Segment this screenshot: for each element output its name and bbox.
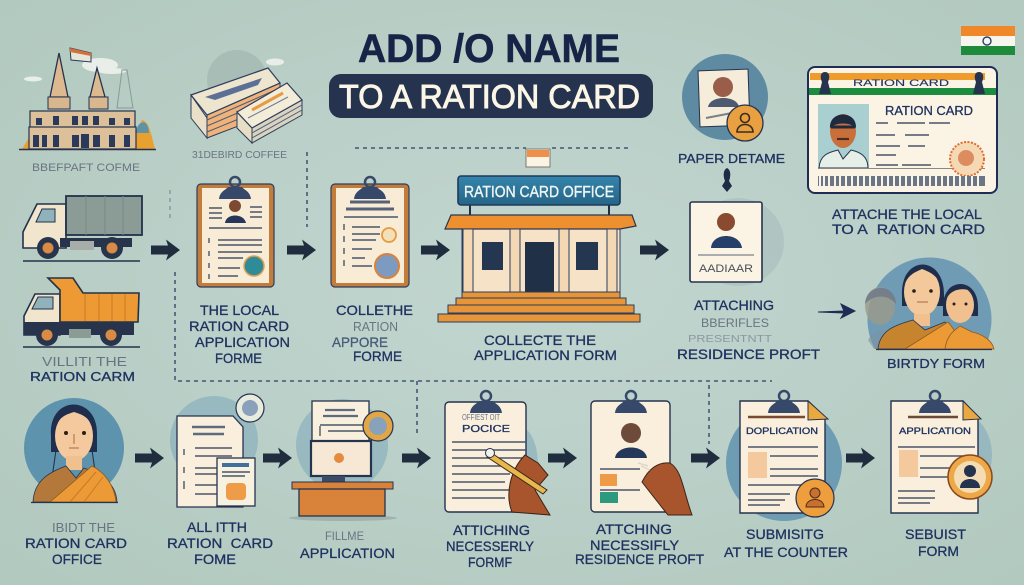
- arrow: [287, 240, 316, 260]
- icon: grey truck: [23, 196, 142, 261]
- icon: small flag: [526, 149, 550, 167]
- label: visit: VILLITI THE: [42, 354, 127, 369]
- arrow: [548, 448, 577, 468]
- label: attaching residence proof: ATTACHING: [694, 297, 774, 313]
- label: attaching necessary form: [446, 522, 535, 570]
- arrow: [421, 240, 450, 260]
- icon: paper stacks: [191, 50, 302, 143]
- label: all ration card form: ALL ITTH: [187, 519, 247, 535]
- icon: orange dump truck: [23, 278, 140, 347]
- label: paper stacks: 31DEBIRD COFFEE: [192, 150, 287, 161]
- label: visit: RATION CARM: [30, 369, 135, 384]
- icon: clipboard with photo and hand: [591, 391, 692, 515]
- icon: sample ration card: RATION CARD: [885, 103, 973, 118]
- label: visit: [30, 354, 135, 384]
- label: local form: THE LOCAL: [200, 302, 279, 318]
- arrow: [402, 448, 431, 468]
- title line one: ADD /O NAME: [358, 27, 620, 71]
- label: local form: FORME: [215, 350, 262, 366]
- label: attaching residence proof: RESIDENCE PROFT: [677, 346, 820, 362]
- label: collect form: APPORE: [332, 334, 388, 350]
- label: filling application: FILLME: [325, 529, 364, 543]
- label: submit form: SEBUIST: [905, 526, 966, 542]
- icon: clipboard local form: [197, 177, 274, 287]
- label: attach to ration card: ATTACHE THE LOCAL: [832, 206, 982, 222]
- illustration: women: [865, 257, 994, 350]
- label: attaching residence proof lower: RESIDENCE PROFT: [575, 551, 704, 567]
- label: attaching necessary form: NECESSERLY: [446, 538, 535, 554]
- icon: passport photo circle: [682, 54, 768, 141]
- illustration: woman at office: [24, 398, 124, 502]
- icon: clipboard with hand and pencil: [445, 391, 550, 515]
- label: submitting at counter: SUBMISITG: [746, 526, 824, 542]
- arrow: [640, 240, 669, 260]
- arrow: [151, 240, 180, 260]
- icon: duplicate application with medal: DOPLICATION: [746, 426, 818, 436]
- icon: sample ration card: RATION CARD: [853, 78, 950, 88]
- label: attaching residence proof: [677, 297, 820, 362]
- icon: duplicate application with medal: [726, 391, 842, 521]
- label: visit office: OFFICE: [52, 551, 102, 567]
- label: all ration card form: FOME: [194, 551, 236, 567]
- label: submit form: [905, 526, 966, 559]
- label: collect application: COLLECTE THE: [484, 332, 596, 348]
- label: collect form: RATION: [353, 319, 398, 334]
- label: visit office: IBIDT THE: [52, 520, 115, 535]
- arrow: thin: [818, 304, 855, 318]
- label: filling application: APPLICATION: [300, 545, 395, 561]
- icon: application with seal: APPLICATION: [899, 426, 971, 436]
- dashed connectors: [170, 148, 772, 444]
- label: collect application: [474, 332, 617, 363]
- label: submitting at counter: AT THE COUNTER: [724, 544, 848, 560]
- label: all ration card form: RATION CARD: [167, 535, 273, 551]
- label: birthday form: BIRTDY FORM: [887, 356, 985, 371]
- label: attaching residence proof lower: [575, 521, 704, 567]
- icon: sample ration card: [808, 67, 997, 193]
- arrow: [263, 448, 292, 468]
- icon: documents with seal: [170, 394, 264, 507]
- icon: down pointer: [722, 168, 732, 192]
- label: attaching residence proof: BBERIFLES: [701, 316, 769, 330]
- label: attach to ration card: [832, 206, 985, 237]
- office sign: RATION CARD OFFICE: [464, 184, 614, 201]
- label: visit office: [25, 520, 127, 567]
- label: attaching residence proof: PRESENTNTT: [688, 334, 772, 345]
- label: collect application: APPLICATION FORM: [474, 347, 617, 363]
- label: collect form: [332, 302, 413, 364]
- label: submit form: FORM: [918, 543, 959, 559]
- arrow: [691, 448, 720, 468]
- icon: clipboard with hand and pencil: POCICE: [462, 424, 510, 435]
- icon: aadhaar card: [690, 198, 784, 286]
- icon: clipboard with hand and pencil: OFFIEST OIT: [462, 413, 500, 422]
- label: attaching necessary form: FORMF: [468, 554, 512, 570]
- icon: government building: [19, 48, 156, 150]
- label: local form: RATION CARD: [189, 318, 289, 334]
- label: local form: APPLICATION: [195, 334, 290, 350]
- label: attaching residence proof lower: NECESSIFLY: [590, 537, 680, 553]
- title banner: TO A RATION CARD: [339, 78, 640, 115]
- title: [329, 27, 653, 118]
- label: attaching necessary form: ATTICHING: [453, 522, 530, 538]
- icon: application with seal: [891, 391, 992, 513]
- label: local form: [189, 302, 290, 366]
- label: visit office: RATION CARD: [25, 535, 127, 551]
- label: attaching residence proof lower: ATTCHING: [596, 521, 672, 537]
- arrow: [135, 448, 164, 468]
- office sign: [458, 176, 620, 205]
- label: filling application: [300, 529, 395, 561]
- icon: clipboard collect form: [331, 177, 409, 287]
- label: building: BBEFPAFT COFME: [32, 162, 140, 174]
- icon: India flag: [961, 26, 1015, 55]
- label: attach to ration card: TO A RATION CARD: [832, 221, 985, 237]
- arrow: [846, 448, 875, 468]
- icon: aadhaar card: AADIAAR: [699, 263, 753, 275]
- icon: ration card office building: [438, 176, 640, 322]
- label: collect form: COLLETHE: [336, 302, 413, 318]
- label: paper detame: PAPER DETAME: [678, 151, 785, 166]
- label: collect form: FORME: [353, 348, 402, 364]
- icon: computer on desk: [289, 399, 397, 521]
- label: all ration card form: [167, 519, 273, 567]
- label: submitting at counter: [724, 526, 848, 560]
